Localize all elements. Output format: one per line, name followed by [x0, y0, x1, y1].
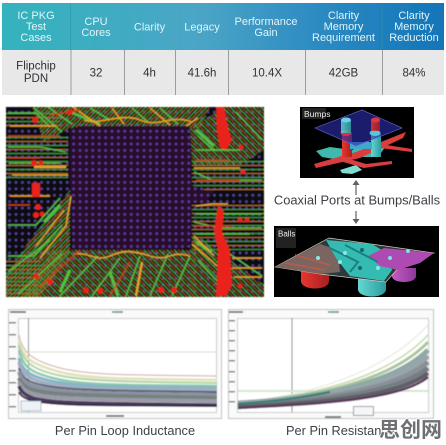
teal plane pieces [316, 141, 386, 174]
table header row: Gain [254, 27, 278, 39]
chart title and axis captions [9, 311, 124, 417]
table data row: 42GB [329, 68, 359, 80]
inset: bumps 3D view [300, 107, 414, 178]
chart: per pin loop inductance [8, 310, 222, 418]
table header row: Clarity [398, 10, 430, 22]
table header row: Requirement [312, 32, 375, 44]
table header row: Legacy [184, 22, 220, 34]
table header row: Performance [235, 16, 297, 28]
chart legend [354, 406, 374, 416]
inset: balls 3D view [274, 226, 439, 297]
label: Bumps: Bumps [304, 109, 330, 119]
trace texture regions [6, 107, 264, 297]
inductance curves [19, 335, 217, 406]
coaxial ports label: Coaxial Ports at Bumps/Balls [274, 192, 440, 208]
table header row: CPU [84, 16, 108, 28]
caption: per pin loop inductance: Per Pin Loop Inductance [55, 423, 195, 438]
table header row: Cores [81, 27, 111, 39]
arrow down [352, 211, 360, 224]
table: performance results [2, 3, 444, 95]
table header row: Test [26, 21, 46, 33]
table header row: Memory [324, 21, 364, 33]
table header row: Clarity [328, 10, 360, 22]
translucent blue plane [315, 110, 402, 146]
red traces [314, 132, 412, 168]
caption: per pin resistance: Per Pin Resistance [286, 423, 395, 438]
watermark: 思创网 [379, 414, 442, 444]
table data row: 84% [402, 68, 426, 80]
upper pillars [340, 118, 380, 136]
routed traces [8, 105, 262, 296]
chart title and axis captions [229, 311, 341, 418]
table data row: PDN [24, 73, 48, 85]
table header row: Reduction [389, 32, 439, 44]
table header row: Cases [20, 32, 52, 44]
red power shapes [31, 107, 250, 296]
central die area with via grid [70, 126, 215, 250]
table data row [2, 50, 444, 95]
table data row: 41.6h [188, 68, 216, 80]
arrow up [352, 180, 360, 195]
chart legend [21, 401, 41, 411]
ball cylinders [301, 268, 416, 296]
label: Balls [276, 228, 296, 248]
PCB layout image [6, 105, 264, 297]
table data row: 10.4X [252, 68, 282, 80]
table header row: Clarity [134, 22, 166, 34]
table data row: Flipchip [16, 60, 56, 72]
table header row: IC PKG [17, 10, 55, 22]
substrate plane [275, 238, 434, 282]
resistance curves [238, 325, 428, 408]
label: Balls: Balls [278, 230, 295, 238]
chart: per pin resistance [228, 310, 434, 418]
table header row: Memory [394, 21, 434, 33]
table header row [2, 3, 444, 50]
table data row: 4h [143, 68, 156, 80]
lower pillars [342, 133, 381, 157]
table data row: 32 [90, 68, 102, 80]
